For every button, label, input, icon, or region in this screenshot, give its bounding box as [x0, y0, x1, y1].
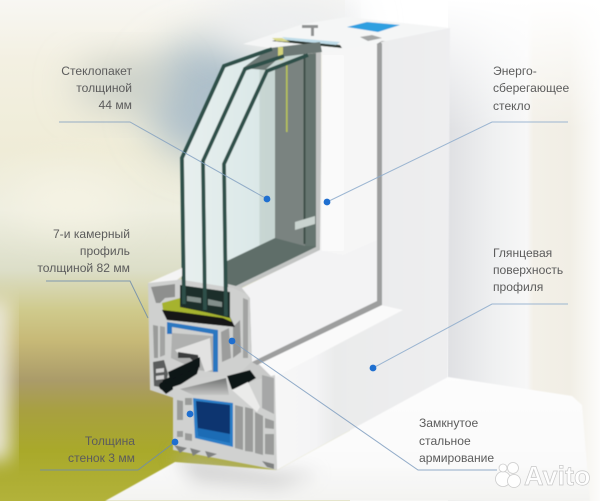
- lower blue reinforcement: [193, 398, 233, 447]
- dark spacer area: [227, 52, 321, 293]
- lower chambers: [177, 398, 274, 455]
- lower frame section: [173, 375, 277, 470]
- dark seal under glass: [162, 306, 235, 327]
- inner glass surfaces: [184, 48, 320, 300]
- upper blue reinforcement: [167, 322, 218, 372]
- label: glass unit thickness: Стеклопакет: [61, 64, 132, 78]
- black gaskets: [159, 357, 256, 397]
- label: glossy profile surface: Глянцевая: [493, 246, 552, 260]
- label: wall thickness: стенок 3 мм: [68, 451, 135, 465]
- label: seven-chamber profile: профиль: [80, 244, 130, 258]
- watermark: Avito: Avito: [524, 461, 590, 491]
- label: seven-chamber profile: толщиной 82 мм: [37, 261, 130, 275]
- glass foot: [180, 285, 230, 318]
- label: glass unit thickness: толщиной: [76, 81, 132, 95]
- section backing: [225, 284, 280, 470]
- leader line: triple glazing: [59, 122, 270, 202]
- label: seven-chamber profile: 7-и камерный: [53, 227, 130, 241]
- label: steel reinforcement: армирование: [419, 451, 494, 465]
- label: glossy profile surface: поверхность: [493, 263, 563, 277]
- glazing bead corner: [148, 268, 182, 283]
- profile cross-section: [148, 279, 277, 470]
- lime seal strip: [162, 298, 232, 322]
- top spacers: [243, 42, 322, 70]
- bottom feet: [174, 445, 274, 469]
- leader line: steel reinforcement: [229, 338, 497, 470]
- leader line: seven-chamber profile: [46, 281, 193, 417]
- label: steel reinforcement: стальное: [419, 434, 471, 448]
- frame top surface: [243, 17, 450, 53]
- label: glossy profile surface: профиля: [493, 280, 543, 294]
- sill and floor: [105, 377, 590, 501]
- upper sash section: [148, 279, 251, 398]
- glass unit: [184, 42, 322, 300]
- label: energy-saving glass: стекло: [493, 99, 531, 113]
- frame white face: [258, 28, 450, 470]
- leader line: wall thickness: [40, 439, 178, 470]
- upper chamber interior: [171, 333, 213, 372]
- leader line: energy-saving glass: [324, 122, 568, 205]
- frame groove: [252, 43, 382, 365]
- label: wall thickness: Толщина: [85, 434, 135, 448]
- label: glass unit thickness: 44 мм: [99, 98, 132, 112]
- label: energy-saving glass: сберегающее: [493, 81, 569, 95]
- pane edges: [182, 49, 308, 316]
- label: steel reinforcement: Замкнутое: [419, 416, 478, 430]
- label: energy-saving glass: Энерго-: [493, 64, 537, 78]
- leader line: glossy surface: [370, 304, 568, 371]
- window illustration: [105, 17, 590, 501]
- sash white face: [242, 44, 377, 362]
